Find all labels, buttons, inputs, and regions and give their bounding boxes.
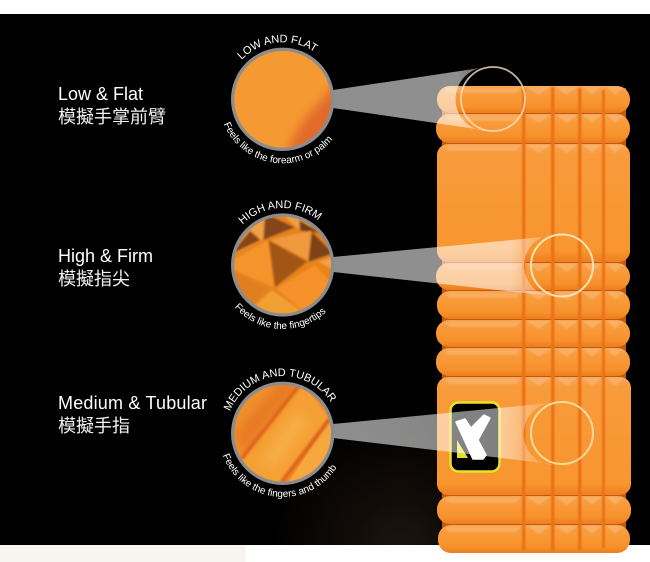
target ring 3 <box>531 402 593 464</box>
label: medium and tubular <box>58 393 207 436</box>
arc text: medium and tubular: MEDIUM AND TUBULAR <box>223 368 336 411</box>
zoom beam 1 <box>333 68 490 131</box>
label: high and firm <box>58 246 153 289</box>
caption: forearm or palm: Feels like the forearm or palm <box>224 122 332 164</box>
bottom floor band <box>0 545 650 562</box>
logo badge <box>450 402 500 472</box>
detail circle: low and flat <box>231 34 334 151</box>
top white band <box>0 0 650 14</box>
label: medium and tubular: 模擬手指 <box>58 416 130 436</box>
label: high and firm: 模擬指尖 <box>58 269 130 289</box>
detail circle: high and firm <box>231 200 334 317</box>
cell highlights <box>445 87 624 534</box>
foam roller <box>436 86 631 553</box>
label: high and firm: High & Firm <box>58 246 153 266</box>
caption: fingertips: Feels like the fingertips <box>235 303 326 329</box>
detail circle: medium and tubular <box>223 368 336 485</box>
label: low and flat <box>58 84 166 127</box>
zoom beam 2 <box>333 237 557 297</box>
label: medium and tubular: Medium & Tubular <box>58 393 207 413</box>
target ring 1 <box>461 67 525 131</box>
vertical grooves <box>522 87 605 551</box>
zoom beam 3 <box>333 403 560 465</box>
label: low and flat: 模擬手掌前臂 <box>58 107 166 127</box>
label: low and flat: Low & Flat <box>58 84 143 104</box>
K mark <box>456 415 490 459</box>
arc text: high and firm: HIGH AND FIRM <box>238 200 322 224</box>
caption: fingers and thumb: Feels like the fingers and thumb <box>223 453 336 499</box>
target ring 2 <box>531 234 593 296</box>
arc text: low and flat: LOW AND FLAT <box>237 34 318 60</box>
